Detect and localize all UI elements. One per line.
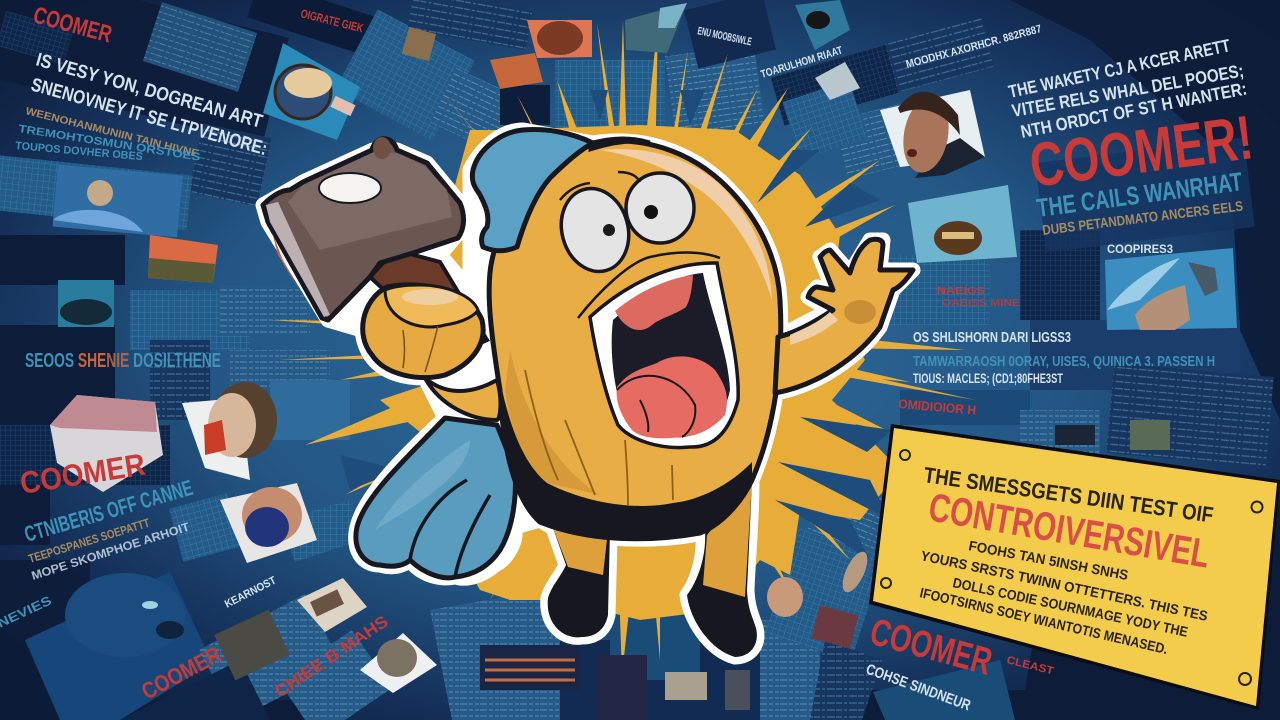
eye: right (626, 173, 694, 243)
hand on hammer (363, 285, 483, 378)
sign body: DOLLS CODIE SOURNMAGE YODY THE (951, 574, 1189, 640)
text block: left middle: CTNIBERIS OFF CANNE (21, 475, 196, 547)
right arm and hand (775, 239, 913, 393)
text block: top left: WEENOHANMUNIIN TAIN HIVNE (24, 105, 200, 160)
thumbnail: masked face (220, 483, 317, 563)
text block: bottom right: COOMER (866, 611, 996, 684)
mouth (590, 263, 738, 448)
text block: left middle: COOMER (137, 641, 226, 704)
text block: left middle: KEARNOST (223, 574, 278, 611)
handle (370, 250, 487, 355)
text block: top left: TREMOHTOSMUN ORSTOES (18, 123, 201, 164)
thumbnail: rock portrait (360, 633, 437, 693)
head (263, 139, 464, 320)
text block: top right: THE WAKETY CJ A KCER ARETT (1007, 35, 1232, 102)
text block: top right (905, 23, 1257, 256)
thumbnail: sepia strip (838, 548, 872, 596)
thumbnail: top right fragment (795, 0, 850, 50)
text block: left middle: SEOOS SHENIE DOSILTHENE (25, 350, 221, 372)
hammer (263, 137, 487, 355)
text block: right middle: NAEIGS (937, 286, 985, 297)
text block: right middle: OMIDIOIOR H (898, 396, 977, 418)
text block: left middle: MOPE SKOMPHOE ARHOIT (30, 519, 192, 583)
thumbnail: water object (908, 185, 1017, 263)
text block: right middle: OAEISS MINE (942, 298, 1020, 309)
top highlight (600, 149, 772, 300)
thumbnail: mascot sticker (263, 43, 360, 140)
thumbnail: room (297, 578, 367, 632)
lower tongue (617, 356, 727, 438)
upper tongue (615, 275, 693, 330)
text block: top right: MOODHX AXORHCR. 882R887 (905, 23, 1043, 71)
text block: top centre labels (299, 6, 844, 81)
hammer end face (266, 202, 330, 317)
thumbnail: top red panel (527, 20, 592, 58)
text block: left middle (0, 350, 392, 704)
text block: top left: COOMER (30, 2, 115, 49)
sign body (918, 537, 1209, 657)
text block: left middle: CHIEE B MAHS (272, 612, 392, 701)
shaded side (505, 350, 600, 495)
bottom strip of small photos (480, 645, 750, 720)
text block: right middle: OS SHLISHORN DARI LIGSS3 (913, 329, 1071, 346)
thumbnail: white fragment (815, 62, 860, 100)
body ridges (525, 370, 673, 505)
text block: right middle: TIOUS: MACLES; (CD1;80FHE3ST (913, 370, 1063, 386)
sign heading: THE SMESSGETS DIIN TEST OIF (922, 462, 1215, 528)
thumbnail: blue figure (53, 165, 182, 237)
sign body: FOOHS TAN 5INSH SNHS (967, 537, 1130, 583)
cape (356, 418, 515, 578)
character outline (263, 130, 913, 657)
text block: top left: TOUPOS DOVHER OBES (15, 140, 143, 163)
text block: top left: IS VESY YON, DOGREAN ART (34, 50, 265, 133)
text block: bottom right: CLEAST (1005, 654, 1055, 678)
text block: top right: DUBS PETANDMATO ANCERS EELS (1041, 197, 1244, 238)
thumbnail: dark rock (58, 280, 114, 327)
thumbnail: blue face (65, 573, 185, 657)
hammer top band (288, 153, 452, 250)
thumbnail: pink building (50, 395, 163, 492)
thumbnail: small face (767, 577, 803, 617)
text block: top centre labels: TOARULHOM RIAAT (759, 44, 844, 81)
text block: top left (15, 2, 269, 164)
hair (472, 130, 593, 251)
sign body: YOURS SRSTS TWINN OTTETTERS. THIS TES (919, 547, 1209, 624)
legs and boots (548, 480, 757, 657)
black waistband (500, 380, 752, 539)
patterned panels right (1020, 230, 1100, 320)
patterned panels bottom (430, 588, 578, 720)
thumbnail: small photo bottom right (811, 605, 859, 649)
text block: top left: SNENOVNEY IT SE LTPVENORE: (29, 75, 269, 160)
thumbnail: top multicolour panel (625, 3, 687, 53)
eye: left (552, 181, 638, 279)
thumbnail: top orange panel (490, 53, 543, 89)
text block: left middle: TEEPOSPANES SOEPATTT (27, 515, 152, 566)
patterned panels left (143, 2, 257, 92)
starburst gaps (340, 90, 892, 560)
thumbnail: red landscape (148, 235, 218, 283)
warning sign (869, 424, 1280, 710)
sleeve under hand (425, 378, 500, 420)
text block: top centre labels: ENU MOOBSIWLE (696, 25, 753, 48)
patterned panels top (247, 0, 393, 61)
thumbnail: angry man (880, 90, 985, 178)
text block: top right: COOPIRES3 (1107, 242, 1173, 256)
starburst (270, 20, 975, 675)
text block: top centre labels: OIGRATE GIEK (299, 6, 365, 35)
text block: right middle (898, 286, 1215, 418)
body (472, 130, 781, 539)
hammer skull emblem (319, 173, 381, 203)
thumbnail: face profile (182, 382, 277, 480)
brows (560, 172, 720, 318)
thumbnail: right panel photos (1055, 420, 1170, 450)
thumbnail: dark ruins (214, 610, 290, 680)
sign body: IFOOTSIRNS SOEY WIANTOTIS MENASED. (918, 584, 1169, 657)
text block: left middle: COOMER (18, 447, 148, 501)
thumbnail: small collage top left (402, 27, 436, 61)
thumbnail: hand with tool (1105, 248, 1237, 330)
